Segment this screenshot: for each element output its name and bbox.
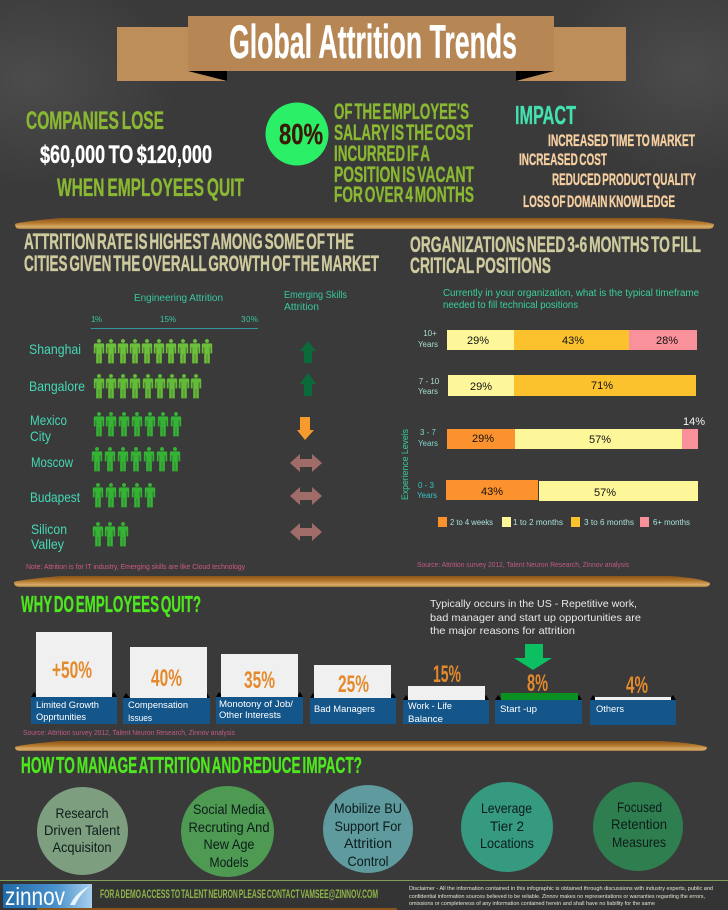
axis header: Emerging Skills bbox=[284, 290, 347, 301]
bar: 10+ years: 43% bbox=[562, 335, 584, 347]
disclaimer: omissions or completeness of any information contained herein and shall have no liability for the same bbox=[409, 901, 655, 907]
legend: 6+ months bbox=[653, 518, 690, 527]
disclaimer: Disclaimer - All the information contained in this infographic is obtained through discussions with industry experts, public and bbox=[409, 886, 713, 892]
disclaimer bbox=[409, 886, 713, 907]
circle: leverage: Leverage bbox=[481, 800, 532, 816]
bar: bad managers bbox=[310, 665, 396, 724]
text: salary cost: OF THE EMPLOYEE'S bbox=[334, 99, 469, 124]
bar: 7-10 years bbox=[448, 375, 696, 396]
circle: research: Research bbox=[56, 805, 108, 821]
city labels: City bbox=[30, 428, 51, 444]
panel: impact: IMPACT bbox=[515, 100, 576, 130]
bar: work-life balance: 15% bbox=[433, 661, 461, 688]
circle: retention: Focused bbox=[617, 799, 662, 815]
callout: the major reasons for attrition bbox=[430, 625, 575, 637]
experience labels: Years bbox=[418, 387, 438, 396]
experience labels: Years bbox=[417, 491, 437, 500]
bar: limited growth: Limited Growth bbox=[36, 700, 99, 711]
people: Bangalore bbox=[94, 374, 201, 398]
divider: wood shelf bbox=[15, 741, 707, 751]
circle: leverage: Locations bbox=[480, 835, 534, 851]
bar: work-life balance: Work - Life bbox=[408, 701, 452, 712]
bar: 0-3 years: 43% bbox=[481, 486, 503, 498]
chart: reasons for quitting bbox=[31, 632, 676, 725]
disclaimer: confidential information sources believed to be reliable. Zinnov makes no representations or warranties regarding the errors, bbox=[409, 894, 705, 900]
bar: work-life balance bbox=[403, 661, 489, 725]
experience labels: Years bbox=[418, 439, 438, 448]
icon: 80% circle: 80% bbox=[279, 119, 323, 151]
panel: 80 percent bbox=[266, 99, 474, 207]
city labels: Bangalore bbox=[29, 378, 85, 394]
people: Budapest bbox=[93, 483, 155, 507]
arrow: Bangalore up bbox=[300, 373, 316, 396]
panel: companies lose: WHEN EMPLOYEES QUIT bbox=[57, 174, 244, 202]
arrow: callout pointer bbox=[514, 644, 552, 670]
note: Note: Attrition is for IT industry, Emerging skills are like Cloud technology bbox=[26, 562, 245, 571]
circle: retention: Measures bbox=[612, 834, 666, 850]
heading: organizations bbox=[410, 232, 701, 278]
bar: others: 4% bbox=[626, 672, 648, 699]
city labels: Valley bbox=[31, 536, 64, 552]
experience labels bbox=[417, 329, 440, 500]
circle: mobilize: Attrition bbox=[344, 835, 392, 851]
text: salary cost: FOR OVER 4 MONTHS bbox=[334, 182, 474, 207]
city labels: Silicon bbox=[31, 521, 67, 537]
circle: leverage bbox=[461, 782, 553, 872]
circle: mobilize: Support For bbox=[334, 818, 402, 834]
bar: limited growth: +50% bbox=[52, 657, 92, 684]
circle: mobilize bbox=[323, 785, 413, 873]
bar: compensation: 40% bbox=[151, 665, 182, 692]
panel: measures bbox=[37, 782, 683, 877]
bar: bad managers: Bad Managers bbox=[314, 704, 375, 715]
bar: compensation: Compensation bbox=[128, 700, 188, 711]
bar: monotony: Monotony of Job/ bbox=[219, 699, 293, 710]
legend: 2 to 4 weeks bbox=[450, 518, 493, 527]
bar: start-up bbox=[495, 670, 582, 724]
circle: social media: New Age bbox=[204, 836, 255, 852]
people: Mexico City bbox=[94, 412, 181, 436]
circle: social media: Social Media bbox=[193, 801, 265, 817]
city labels: Moscow bbox=[31, 454, 74, 470]
axis header bbox=[91, 290, 347, 329]
experience labels: 0 - 3 bbox=[418, 481, 435, 490]
bar: 0-3 years: 57% bbox=[594, 487, 616, 499]
bar: 3-7 years: 29% bbox=[472, 433, 494, 445]
circle: mobilize: Mobilize BU bbox=[334, 800, 402, 816]
heading: attrition rate bbox=[24, 229, 379, 276]
bar: 3-7 years: 14% bbox=[683, 416, 705, 428]
bar: compensation: Issues bbox=[128, 713, 152, 724]
legend: 3 to 6 months bbox=[584, 518, 634, 527]
panel: impact: INCREASED COST bbox=[519, 150, 607, 169]
axis header: 15% bbox=[160, 315, 176, 324]
arrow: Mexico City down bbox=[297, 417, 314, 440]
bar: 10+ years: 29% bbox=[467, 335, 489, 347]
chart: city attrition pictogram bbox=[29, 290, 347, 552]
circle: research bbox=[37, 787, 128, 875]
people: Moscow bbox=[92, 447, 180, 471]
title: Global Attrition Trends bbox=[229, 15, 517, 68]
bar: others bbox=[590, 672, 676, 725]
heading: organizations: CRITICAL POSITIONS bbox=[410, 253, 551, 278]
arrow: Silicon Valley flat bbox=[290, 523, 322, 541]
bar: work-life balance: Balance bbox=[408, 714, 443, 725]
chart: time to fill stacked bars bbox=[400, 288, 705, 527]
source: bars: Source: Attrition survey 2012, Talent Neuron Research, Zinnov analysis bbox=[23, 728, 235, 737]
people: Shanghai bbox=[94, 339, 212, 363]
bar: 7-10 years: 29% bbox=[470, 381, 492, 393]
circle: retention: Retention bbox=[611, 816, 667, 832]
city labels: Budapest bbox=[30, 489, 80, 505]
chart question: Currently in your organization, what is the typical timeframe bbox=[443, 288, 699, 299]
bar: 10+ years bbox=[447, 330, 697, 350]
panel: companies lose: $60,000 TO $120,000 bbox=[40, 141, 212, 169]
divider: wood shelf bbox=[15, 218, 714, 229]
callout bbox=[430, 598, 641, 637]
divider: wood shelf bbox=[14, 576, 710, 587]
bar: 3-7 years bbox=[447, 416, 705, 449]
bar: monotony: Other Interests bbox=[219, 710, 281, 721]
panel: companies lose: COMPANIES LOSE bbox=[26, 107, 164, 135]
circle: leverage: Tier 2 bbox=[490, 818, 524, 834]
chart question: needed to fill technical positions bbox=[443, 300, 578, 311]
city labels bbox=[29, 341, 85, 552]
bar: start-up: 8% bbox=[527, 670, 548, 697]
source: chart: Source: Attrition survey 2012, Talent Neuron Research, Zinnov analysis bbox=[417, 560, 629, 569]
callout: Typically occurs in the US - Repetitive work, bbox=[430, 598, 637, 610]
bar: others: Others bbox=[596, 704, 624, 715]
heading: how to manage: HOW TO MANAGE ATTRITION AND REDUCE IMPACT? bbox=[21, 752, 362, 778]
experience labels: 10+ bbox=[423, 329, 437, 338]
callout: bad manager and start up opportunities are bbox=[430, 612, 641, 624]
axis header: Engineering Attrition bbox=[134, 293, 223, 304]
experience labels: 3 - 7 bbox=[420, 428, 437, 437]
circle: mobilize: Control bbox=[348, 853, 388, 869]
panel: footer bbox=[0, 880, 728, 910]
circle: social media: Recruting And bbox=[188, 819, 270, 835]
axis header: 30% bbox=[241, 315, 258, 324]
panel: impact bbox=[515, 100, 696, 211]
text: salary cost: POSITION IS VACANT bbox=[334, 162, 474, 187]
arrow: Shanghai up bbox=[300, 341, 316, 363]
experience labels: 7 - 10 bbox=[419, 377, 440, 386]
bar: 10+ years: 28% bbox=[656, 335, 678, 347]
bar: monotony bbox=[216, 654, 303, 724]
bar: 3-7 years: 57% bbox=[589, 434, 611, 446]
bar: 0-3 years bbox=[446, 480, 698, 501]
circle: research: Driven Talent bbox=[44, 822, 120, 838]
arrow: Budapest flat bbox=[290, 487, 322, 505]
experience labels: Years bbox=[418, 340, 438, 349]
bar: 7-10 years: 71% bbox=[591, 380, 613, 392]
heading: attrition rate: ATTRITION RATE IS HIGHEST AMONG SOME OF THE bbox=[24, 229, 354, 254]
bar: bad managers: 25% bbox=[338, 671, 369, 698]
city labels: Shanghai bbox=[29, 341, 81, 357]
legend bbox=[438, 517, 690, 527]
people: Silicon Valley bbox=[93, 522, 128, 546]
city labels: Mexico bbox=[30, 412, 67, 428]
circle: social media bbox=[181, 786, 274, 877]
axis header: Attrition bbox=[284, 302, 319, 313]
axis label: Experience Levels bbox=[400, 429, 411, 500]
text: salary cost: SALARY IS THE COST bbox=[334, 120, 473, 145]
heading: attrition rate: CITIES GIVEN THE OVERALL GROWTH OF THE MARKET bbox=[24, 251, 379, 276]
bar: monotony: 35% bbox=[244, 667, 275, 694]
bar: limited growth bbox=[31, 632, 117, 724]
axis header: 1% bbox=[91, 315, 102, 324]
circle: social media: Models bbox=[210, 854, 248, 870]
bar: compensation bbox=[123, 647, 210, 724]
legend: 1 to 2 months bbox=[513, 518, 563, 527]
heading: why do employees quit: WHY DO EMPLOYEES QUIT? bbox=[21, 591, 201, 617]
arrow: Moscow flat bbox=[290, 454, 322, 472]
circle: research: Acquisiton bbox=[52, 839, 112, 855]
text: salary cost bbox=[334, 99, 474, 207]
bar: limited growth: Opprtunities bbox=[36, 712, 86, 723]
chart question bbox=[443, 288, 699, 311]
bar: start-up: Start -up bbox=[500, 704, 537, 715]
text: salary cost: INCURRED IF A bbox=[334, 141, 430, 166]
icon: 80% circle bbox=[266, 102, 328, 166]
panel: companies lose bbox=[26, 107, 244, 202]
contact line: FOR A DEMO ACCESS TO TALENT NEURON PLEASE CONTACT VAMSEE@ZINNOV.COM bbox=[100, 889, 378, 901]
title banner bbox=[117, 15, 626, 81]
circle: retention bbox=[593, 782, 683, 871]
